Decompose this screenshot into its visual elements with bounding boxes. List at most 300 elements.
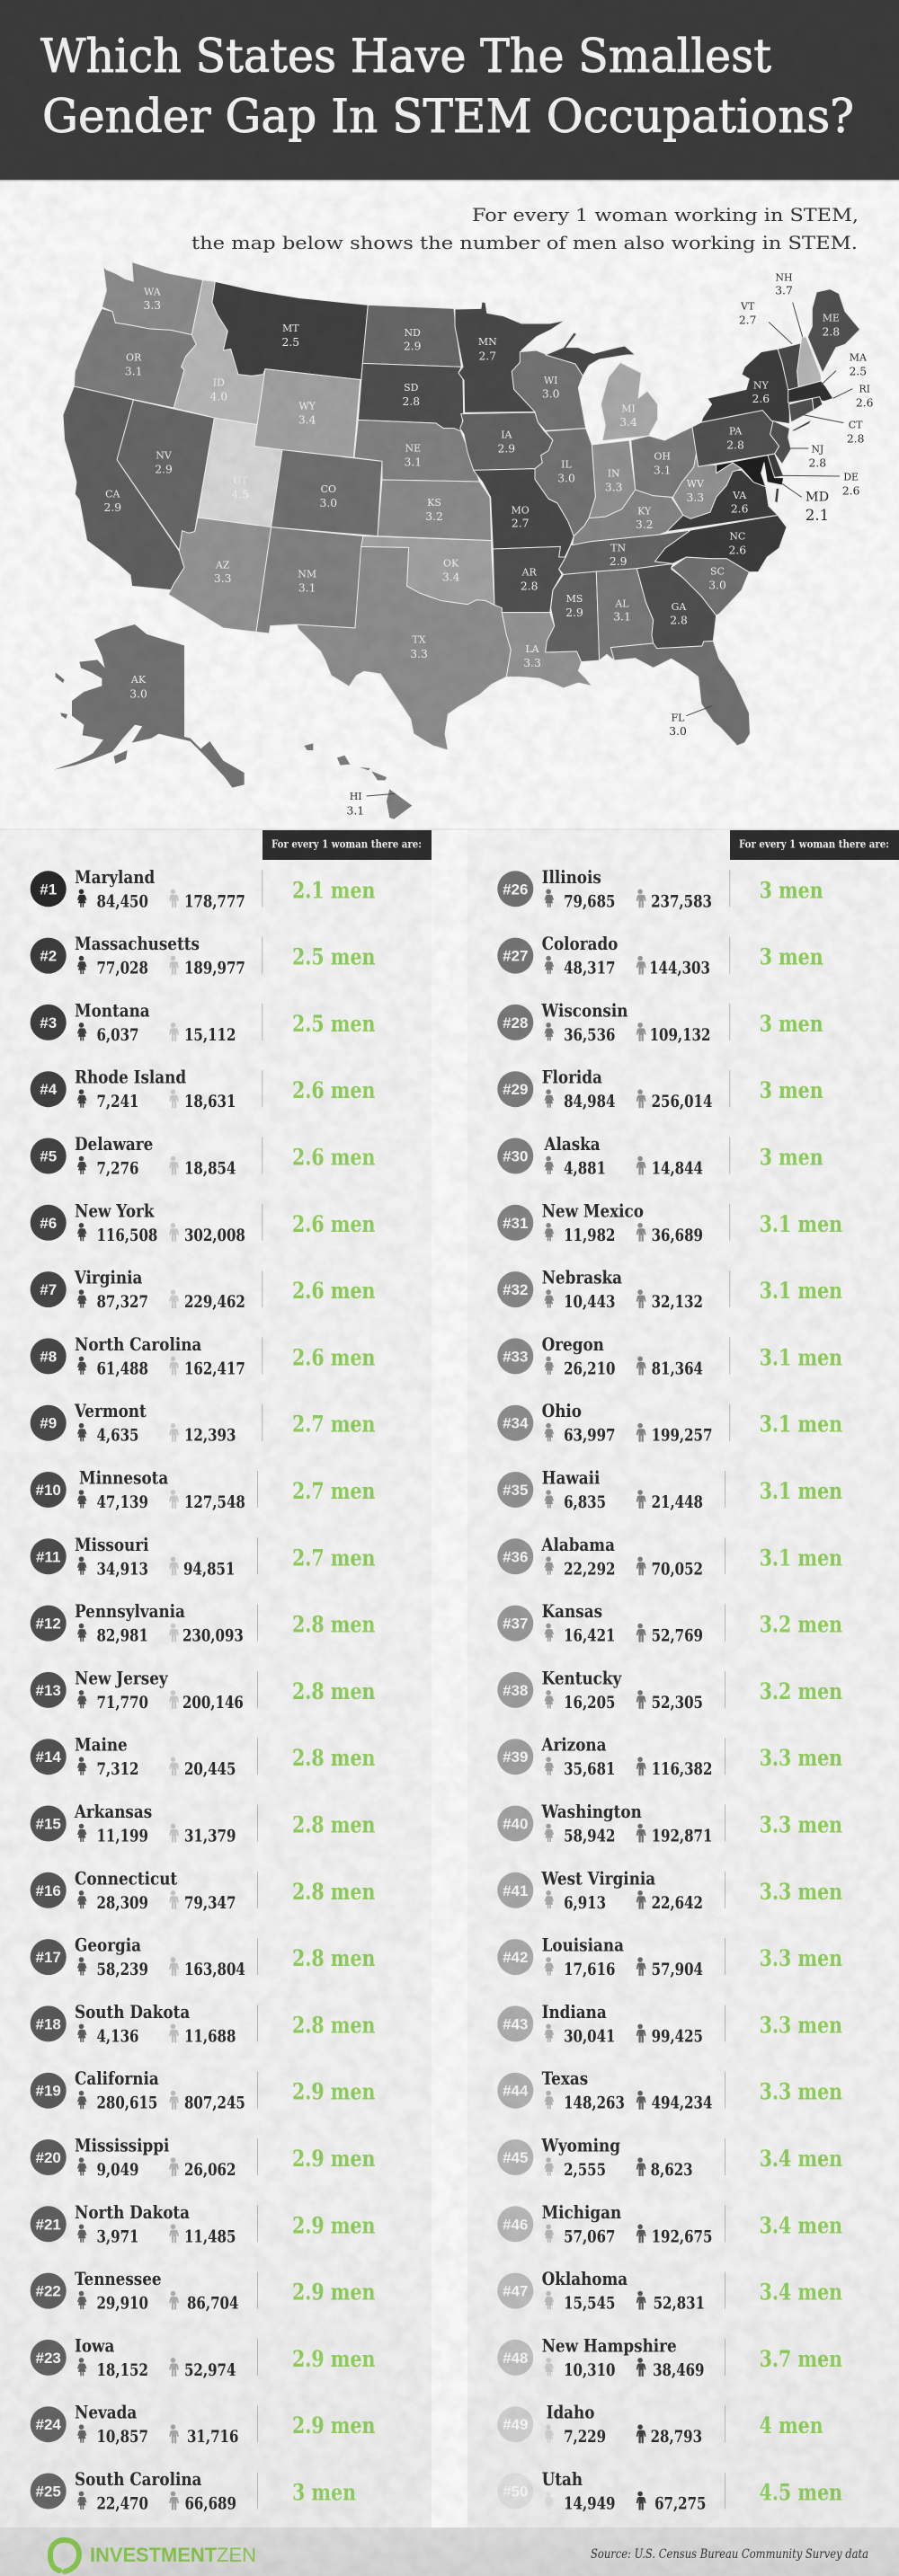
row: Iowa [31,2336,376,2380]
state: KS [378,480,492,541]
state: CA: 2.9 [104,501,121,514]
state: MA: MA [850,351,868,363]
state: SC [672,557,749,615]
row: New Hampshire: #48 [503,2350,528,2367]
row: Colorado: 3 men [760,945,823,970]
row: West Virginia: 22,642 [652,1893,703,1913]
row: Utah: #50 [503,2483,528,2500]
state: ND: ND [404,327,421,339]
state: IL: IL [561,458,573,470]
row: New York [31,1201,376,1245]
row: Indiana: Indiana [542,2003,607,2023]
row: Kansas: Kansas [542,1602,602,1623]
state: HI: 3.1 [347,804,364,817]
title [40,31,854,144]
row: North Dakota: 3,971 [96,2227,138,2247]
column header: left: For every 1 woman there are: [271,837,422,850]
row: Utah [497,2470,842,2514]
row: South Carolina: #25 [36,2483,61,2500]
row: Wyoming: 2,555 [564,2160,606,2181]
state: IL: 3.0 [557,472,575,484]
state: LA [502,613,592,688]
state: MN [455,302,565,412]
state: SC: 3.0 [708,579,726,591]
row: Florida: #29 [503,1081,528,1098]
row: Tennessee: 2.9 men [292,2280,376,2306]
row: Colorado [497,934,823,978]
row: Hawaii: 3.1 men [760,1479,842,1505]
state: CA [63,386,184,590]
state: NM [256,527,363,633]
state: AZ: 3.3 [214,572,231,585]
row: Missouri: 34,913 [96,1560,148,1580]
row: Tennessee: Tennessee [75,2270,162,2290]
state: MD: 2.1 [806,507,829,524]
state: CO: 3.0 [320,497,337,509]
state: ID [174,280,265,425]
state: IA [460,412,553,470]
row: Kansas [497,1602,842,1646]
title: Gender Gap In STEM Occupations? [42,91,854,144]
row: Montana: 2.5 men [292,1012,376,1037]
state: WV: WV [687,478,705,490]
state: DE [768,454,860,498]
state: NY: NY [753,379,770,391]
row: Massachusetts: #2 [40,948,57,965]
state: IN: IN [608,467,620,479]
row: Indiana: 3.3 men [760,2014,842,2039]
ranking column: right [497,867,842,2514]
state: FL [610,641,750,746]
row: Iowa: 2.9 men [292,2347,376,2372]
row: Alabama: Alabama [541,1535,615,1555]
state: MN: MN [478,336,497,348]
row: Arizona: 35,681 [564,1760,616,1780]
row: Utah: 14,949 [564,2494,616,2514]
row: New York: New York [75,1201,156,1222]
row: Arizona: 3.3 men [760,1746,842,1772]
row: Tennessee [31,2270,376,2314]
row: Vermont: #9 [40,1415,57,1432]
row: New Mexico: #31 [503,1215,528,1232]
row: Arkansas [31,1802,376,1846]
map intro text [191,204,859,253]
row: Delaware: 7,276 [96,1159,138,1179]
state: MT: 2.5 [282,336,299,349]
row: Alabama: 70,052 [652,1560,703,1580]
row: Ohio: 63,997 [564,1426,616,1446]
row: Rhode Island: 2.6 men [292,1078,376,1104]
row: Texas: Texas [542,2069,588,2090]
row: North Dakota: North Dakota [75,2202,190,2223]
row: Hawaii [497,1468,842,1513]
row: Tennessee: #22 [36,2283,61,2300]
row: Montana: #3 [40,1014,57,1031]
logo: InvestmentZen [50,2540,256,2572]
row: New Jersey: #13 [36,1682,61,1699]
state: OH [631,427,697,497]
state: NC: 2.6 [729,544,746,556]
row: Colorado: 48,317 [564,959,616,978]
row: Missouri: 2.7 men [292,1545,376,1571]
row: North Carolina: #8 [40,1348,57,1365]
state: MS [546,571,600,662]
row: Maryland: 2.1 men [292,878,376,904]
state: VT [739,301,802,390]
state: NH [775,272,821,387]
row: Texas: 148,263 [564,2094,625,2113]
row: Wyoming: 3.4 men [760,2147,842,2173]
state: GA: GA [672,601,687,613]
row: Rhode Island: Rhode Island [75,1067,186,1088]
row: Maryland: Maryland [75,867,155,888]
logo: InvestmentZen: INVESTMENT [90,2544,218,2566]
state: PA: 2.8 [726,439,744,452]
row: California: California [75,2069,159,2090]
state: ND: 2.9 [404,341,422,353]
row: South Carolina [31,2470,356,2514]
row: Montana: Montana [75,1001,150,1022]
row: West Virginia: West Virginia [541,1869,655,1890]
row: Idaho: Idaho [547,2403,594,2423]
western states [63,262,511,750]
row: Nevada: 2.9 men [292,2413,376,2439]
state: OR: OR [126,351,142,363]
row: Michigan: #46 [503,2216,528,2233]
row: Illinois [497,867,823,912]
state: HI [304,743,412,819]
state: WA: 3.3 [144,299,161,312]
row: New Hampshire: New Hampshire [542,2336,677,2357]
row: Vermont: 2.7 men [292,1412,376,1438]
state: MO: 2.7 [512,518,529,530]
row: Mississippi: 2.9 men [292,2147,376,2173]
Alaska and Hawaii [54,624,412,819]
row: North Dakota: #21 [36,2216,61,2233]
row: South Dakota: 11,688 [184,2027,236,2047]
row: Tennessee: 86,704 [187,2294,238,2314]
state: SC: SC [710,565,725,577]
row: New Jersey: New Jersey [75,1669,169,1689]
row: Rhode Island: 7,241 [96,1093,138,1112]
state: FL: 3.0 [669,725,687,738]
row: North Carolina: 2.6 men [292,1346,376,1371]
row: Idaho: 7,229 [564,2428,606,2448]
row: Florida: Florida [542,1067,602,1088]
state: MA [788,351,868,403]
state: MN: 2.7 [479,350,496,362]
state: SD [358,363,464,431]
row: Delaware: #5 [40,1148,57,1164]
row: Louisiana: #42 [503,1949,528,1966]
row: Idaho [497,2403,823,2448]
row: South Dakota: #18 [36,2015,61,2032]
row: Kentucky [497,1669,842,1713]
row: Georgia: #17 [36,1949,61,1966]
state: WY: WY [298,401,316,412]
row: Connecticut: #16 [36,1882,61,1899]
row: Indiana: 30,041 [564,2027,616,2047]
row: Montana: 6,037 [96,1025,138,1045]
state: AR: AR [521,566,537,578]
state: NV: NV [156,450,173,462]
row: Vermont: 12,393 [184,1426,236,1446]
state: NC: NC [729,531,745,543]
row: Colorado: Colorado [542,934,618,955]
state: AK: 3.0 [129,687,147,700]
row: Pennsylvania: #12 [36,1616,61,1633]
state: NE: 3.1 [405,456,422,468]
row: Michigan [497,2202,842,2247]
row: Iowa: #23 [36,2350,61,2367]
state: MI [546,332,658,441]
state: NH: 3.7 [775,284,793,297]
state: ME: 2.8 [823,325,840,338]
row: Wisconsin: #28 [503,1014,528,1031]
state: AL: AL [614,598,629,610]
state: MI: MI [621,403,636,414]
row: Oklahoma: #47 [503,2283,528,2300]
state: CO [271,450,382,536]
state: TN [559,530,690,574]
state: AL: 3.1 [613,610,631,623]
state: WY: 3.4 [298,414,316,427]
row: Colorado: 144,303 [649,959,710,978]
state: OK [361,536,494,605]
row: Utah: 67,275 [654,2494,707,2514]
state: ND [362,305,461,367]
state: AZ [168,518,271,632]
eastern states [455,272,874,746]
row: Kentucky: 16,205 [564,1693,616,1713]
state: MS: 2.9 [565,606,583,619]
row: Nevada: 31,716 [187,2428,238,2448]
row: Alabama [497,1535,842,1580]
row: Montana [31,1001,376,1045]
state: IA: 2.9 [498,443,515,456]
row: Virginia: Virginia [74,1268,142,1288]
state: VT: VT [740,301,755,313]
row: Wyoming: 8,623 [651,2160,693,2181]
row: Wyoming: Wyoming [541,2136,620,2156]
row: Oklahoma: Oklahoma [542,2270,628,2290]
row: Minnesota: Minnesota [79,1468,168,1489]
row: Arkansas: 2.8 men [292,1813,376,1838]
row: Oregon: 81,364 [652,1359,703,1379]
row: Minnesota: 2.7 men [292,1479,376,1505]
state: WV: 3.3 [687,491,704,504]
row: Idaho: 28,793 [651,2428,702,2448]
state: AZ: AZ [215,559,230,571]
row: Minnesota: 47,139 [96,1492,148,1513]
row: Indiana [497,2003,842,2047]
row: Michigan: 192,675 [652,2227,712,2247]
state: MT [212,281,368,380]
state: NV [117,400,214,551]
row: Washington: Washington [541,1802,642,1822]
row: South Dakota: 4,136 [96,2027,138,2047]
row: Louisiana: 57,904 [652,1960,703,1980]
state: CT: 2.8 [847,433,865,446]
state: OH: 3.1 [654,465,671,477]
row: Missouri: 94,851 [183,1560,235,1580]
row: Idaho: 4 men [760,2413,823,2439]
row: New Jersey [31,1669,376,1713]
row: New York: 2.6 men [292,1212,376,1237]
row: South Carolina: 22,470 [96,2494,148,2514]
state: TN: 2.9 [610,555,628,568]
state: WA [102,262,203,335]
logo: InvestmentZen: ZEN [217,2544,256,2566]
row: Hawaii: 21,448 [652,1492,703,1513]
state: LA: 3.3 [523,657,541,669]
row: Oklahoma [497,2270,842,2314]
state: KS: 3.2 [425,510,443,523]
state: CT: CT [849,420,863,431]
row: Tennessee: 29,910 [96,2294,148,2314]
row: Pennsylvania: 82,981 [96,1626,148,1646]
row: Colorado: #27 [503,948,528,965]
row: North Carolina: North Carolina [75,1335,201,1355]
state: DE: DE [843,472,859,483]
row: Wisconsin: 36,536 [564,1025,616,1045]
state: MO: MO [512,504,530,516]
row: New Hampshire: 10,310 [564,2360,616,2380]
state: RI [812,384,874,411]
row: Arkansas: 11,199 [96,1827,148,1846]
footer band [0,2527,899,2576]
row: Maryland: #1 [40,881,57,898]
state: ID: 4.0 [210,391,227,403]
row: Maryland: 84,450 [96,892,148,912]
row: West Virginia: 6,913 [564,1893,606,1913]
row: Maryland [31,867,376,912]
row: Iowa: 18,152 [96,2360,148,2380]
row: Florida: 256,014 [652,1093,713,1112]
row: Florida [497,1067,823,1112]
row: Kansas: 52,769 [652,1626,703,1646]
row: Kentucky: 52,305 [652,1693,703,1713]
map intro text: the map below shows the number of men also working in STEM. [191,232,858,253]
row: Michigan: 57,067 [564,2227,616,2247]
state: PA: PA [729,426,743,438]
row: Massachusetts: 77,028 [96,959,148,978]
row: Louisiana [497,1935,842,1980]
state: IN: 3.3 [605,481,622,493]
map of US states [54,262,874,819]
row: Kentucky: Kentucky [542,1669,622,1689]
state: GA [636,563,717,649]
row: Oregon: 26,210 [564,1359,616,1379]
state: CA: CA [105,488,121,500]
row: New Hampshire [497,2336,842,2380]
column header: right [730,830,899,860]
state: GA: 2.8 [670,615,688,627]
row: Maine: 2.8 men [292,1746,376,1772]
row: Texas: 494,234 [652,2094,713,2113]
state: AK: AK [130,674,147,686]
row: Nevada: Nevada [75,2403,137,2423]
state: KY: 3.2 [636,518,653,531]
row: Arizona: 116,382 [652,1760,712,1780]
row: Massachusetts: 2.5 men [292,945,376,970]
row: Washington: 192,871 [652,1827,712,1846]
row: North Carolina: 162,417 [184,1359,245,1379]
row: Alaska [497,1135,823,1179]
state: NV: 2.9 [155,464,173,476]
row: Minnesota: #10 [36,1482,61,1499]
row: Maine: Maine [75,1735,128,1756]
row: New Jersey: 2.8 men [292,1679,376,1704]
column header: left [263,830,432,860]
row: Mississippi: 9,049 [96,2160,138,2181]
state: NY: 2.6 [752,393,770,405]
row: North Dakota [31,2202,376,2247]
row: Florida: 3 men [760,1078,823,1104]
row: Alaska: Alaska [544,1135,601,1155]
row: Alaska: #30 [503,1148,528,1164]
row: Massachusetts: 189,977 [184,959,245,978]
state: AL [596,569,654,660]
row: West Virginia: #41 [503,1882,528,1899]
row: Massachusetts: Massachusetts [75,934,200,955]
row: Idaho: #49 [503,2416,528,2433]
state: IN [589,440,636,518]
state: AR: 2.8 [521,580,539,592]
row: Georgia [31,1935,376,1980]
state: NE: NE [405,443,421,455]
row: Wyoming: #45 [503,2149,528,2166]
state: TX: 3.3 [410,648,428,660]
row: Rhode Island [31,1067,376,1112]
row: California: 2.9 men [292,2080,376,2105]
state: OR [74,308,196,408]
state: NJ [770,420,826,470]
state: ME: ME [823,312,840,323]
state: RI: 2.6 [856,397,874,410]
state: VA: VA [732,490,747,501]
row: Pennsylvania: 2.8 men [292,1613,376,1638]
map intro text: For every 1 woman working in STEM, [472,204,859,226]
row: Illinois: 3 men [760,878,823,904]
row: Alabama: 3.1 men [760,1545,842,1571]
row: Missouri: Missouri [75,1535,148,1555]
state: CT [788,398,865,446]
state: WI: 3.0 [542,387,560,400]
row: Utah: Utah [542,2470,583,2490]
row: South Carolina: 66,689 [185,2494,236,2514]
row: California: 280,615 [96,2094,157,2113]
row: Georgia: 58,239 [96,1960,148,1980]
row: Mississippi: Mississippi [75,2136,169,2156]
state: CO: CO [321,483,336,495]
row: New Mexico: New Mexico [542,1201,644,1222]
row: Illinois: 237,583 [651,892,712,912]
state: AR [493,546,565,613]
row: North Carolina: 61,488 [96,1359,148,1379]
row: Maine [31,1735,376,1780]
state: LA: LA [525,643,540,655]
row: Missouri [31,1535,376,1580]
row: Oregon: 3.1 men [760,1346,842,1371]
row: California: #19 [36,2083,61,2100]
row: Kansas: 3.2 men [760,1613,842,1638]
state: UT: 4.5 [232,489,249,501]
row: Delaware: 18,854 [184,1159,236,1179]
row: Michigan: 3.4 men [760,2213,842,2239]
row: Ohio: #34 [503,1415,529,1432]
state: WI: WI [544,375,557,386]
